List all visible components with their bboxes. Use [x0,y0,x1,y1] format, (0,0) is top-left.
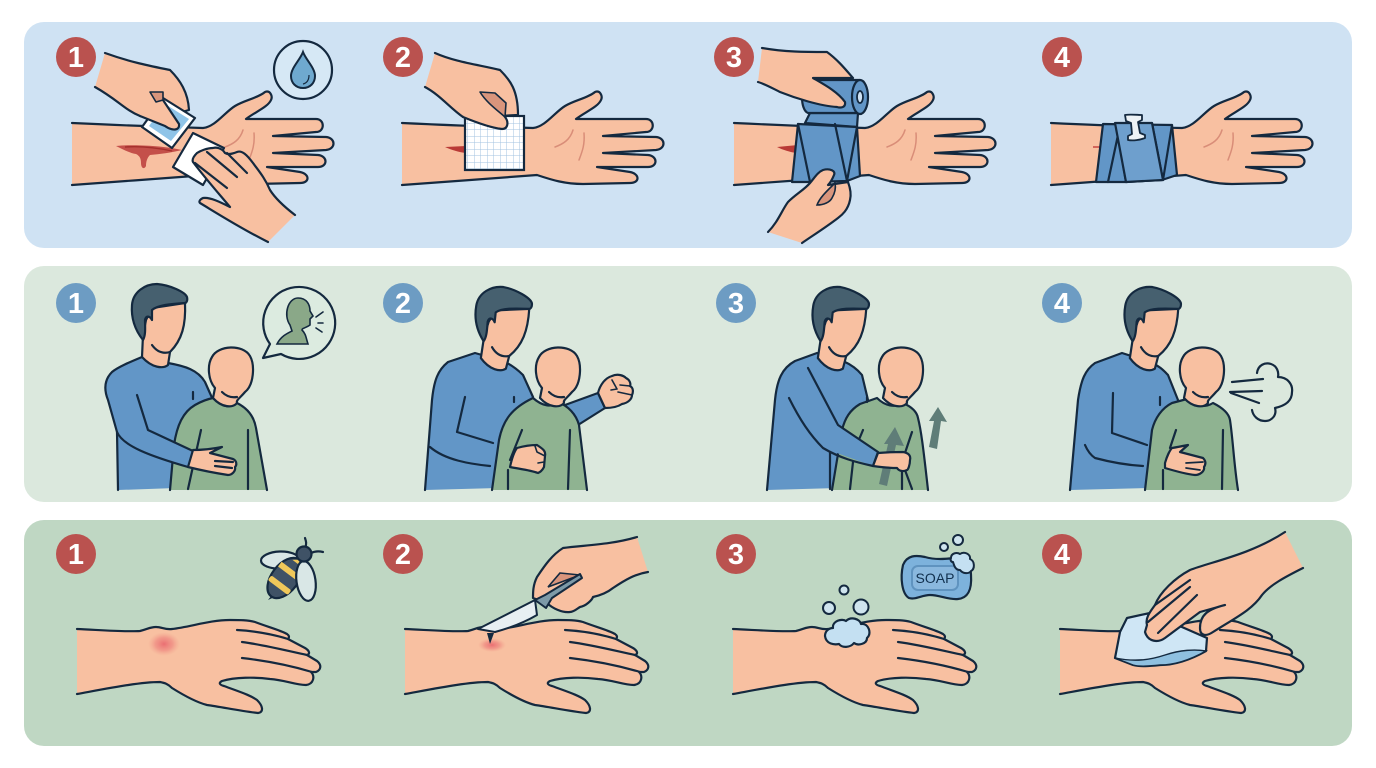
icon: soap bar [902,535,974,599]
icon: water drop [274,41,332,99]
badge 3: 3 [728,288,744,320]
badge 1: 1 [68,288,84,320]
casualty head [879,347,923,406]
hand with sting mark [405,620,648,713]
step 2: make a fist [383,283,633,490]
step 3: wash with soap [716,534,976,713]
rescuer arm and hand [789,368,910,489]
front fist [510,445,545,473]
hand pressing compress [1145,532,1303,641]
raised arm and fist [560,375,633,425]
icon: soap bar: SOAP [916,570,954,586]
step 4: secured bandage [1042,37,1312,185]
step 4: cold compress [1042,532,1303,713]
step 3: wrap bandage [714,37,996,243]
step 1: stand behind person [56,283,335,490]
casualty head [1180,347,1224,406]
casualty torso [170,398,267,490]
hand holding antiseptic packet [95,53,195,148]
casualty sleeve and rescuer arm lines [1085,393,1223,489]
open hand with wound [734,92,996,185]
panel: choking abdominal thrusts [24,266,1352,502]
wrapped bandage [1096,123,1177,182]
gauze pad [465,116,524,170]
step 1: clean the wound [56,37,334,242]
rescuer head [807,284,870,373]
rescuer torso [425,353,533,490]
casualty sleeve lines [188,392,248,489]
hand with red sting mark [77,620,320,713]
open hand with wound [72,92,334,185]
foam on hand [823,586,869,647]
badge 2: 2 [395,288,411,320]
rescuer head [470,284,533,373]
hand [1060,620,1303,713]
badge 4 [1042,283,1082,323]
bandage roll [802,80,868,114]
upward arrows [879,407,947,486]
bandage wrap [792,113,860,182]
badge 4: 4 [1054,288,1070,320]
casualty sleeve and rescuer arm lines [430,397,570,489]
badge 4: 4 [1054,42,1070,74]
badge 3: 3 [726,42,742,74]
step 2: apply gauze [383,37,664,185]
hand pinching bandage end [768,169,851,243]
bandage clip [1125,115,1145,140]
badge 1 [56,37,96,77]
step 2: scrape out stinger [383,534,648,713]
badge 2: 2 [395,42,411,74]
rescuer torso [105,357,213,490]
step 1: identify sting [56,534,323,713]
hand pressing gauze wipe [173,133,295,242]
hand holding roll [758,48,853,107]
badge 2 [383,37,423,77]
casualty sleeve lines [850,397,912,489]
knife [478,574,582,644]
rescuer arm and hand [117,395,236,475]
casualty torso [832,398,928,490]
casualty head [209,347,253,406]
rescuer torso [767,353,868,490]
badge 2 [383,534,423,574]
badge 4 [1042,37,1082,77]
casualty head [536,347,580,406]
open hand with wound [402,92,664,185]
panel: insect sting care [24,520,1352,746]
hand holding knife [533,537,648,612]
badge 3 [716,534,756,574]
badge 3 [714,37,754,77]
open hand with wound [1051,92,1312,185]
rescuer head [1119,284,1182,373]
speech bubble: coughing [263,287,335,359]
step 3: upward thrust [716,283,947,490]
badge 1 [56,283,96,323]
badge 1 [56,534,96,574]
casualty torso [492,398,587,490]
badge 3 [716,283,756,323]
panel: bleeding wound care [24,22,1352,248]
air puff [1230,363,1292,421]
casualty torso [1145,399,1238,490]
badge 1: 1 [68,539,84,571]
step 4: object expelled [1042,283,1292,490]
icon: bee [260,538,323,604]
rescuer head [132,284,187,367]
badge 1: 1 [68,42,84,74]
badge 3: 3 [728,539,744,571]
badge 4: 4 [1054,539,1070,571]
rescuer torso [1070,353,1178,490]
badge 4 [1042,534,1082,574]
cold compress cloth [1115,613,1207,666]
hand holding gauze [425,53,518,129]
badge 2 [383,283,423,323]
hand [733,620,976,713]
hand on abdomen [1165,445,1205,475]
badge 2: 2 [395,539,411,571]
